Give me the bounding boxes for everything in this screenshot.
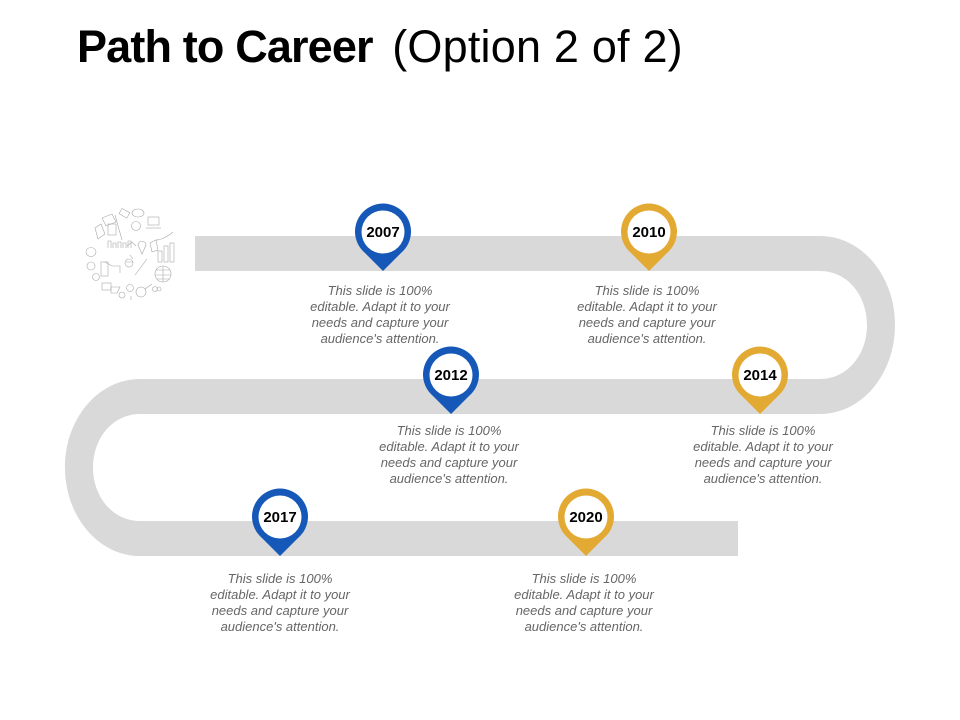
title: Path to Career (Option 2 of 2) <box>77 21 683 72</box>
text: 2020 description: audience's attention. <box>525 619 643 634</box>
text: 2010 description: editable. Adapt it to your <box>577 299 717 314</box>
text: 2017 description: This slide is 100% <box>228 571 332 586</box>
text: 2017 description: audience's attention. <box>221 619 339 634</box>
text: 2007 description <box>310 283 450 346</box>
pin: 2014: 2014 <box>743 367 777 384</box>
text: 2012 description <box>379 423 520 486</box>
text: 2020 description: needs and capture your <box>516 603 652 618</box>
text: 2007 description: editable. Adapt it to your <box>310 299 450 314</box>
pin: 2010 <box>621 204 677 271</box>
text: 2012 description: This slide is 100% <box>397 423 501 438</box>
text: 2007 description: needs and capture your <box>312 315 448 330</box>
text: 2014 description <box>693 423 834 486</box>
text: 2014 description: needs and capture your <box>695 455 831 470</box>
pin: 2020: 2020 <box>569 509 603 526</box>
pin: 2017: 2017 <box>263 509 297 526</box>
pin: 2020 <box>558 489 614 556</box>
text: 2017 description: needs and capture your <box>212 603 348 618</box>
text: 2010 description <box>577 283 718 346</box>
text: 2014 description: This slide is 100% <box>711 423 815 438</box>
text: 2012 description: needs and capture your <box>381 455 517 470</box>
text: 2010 description: audience's attention. <box>588 331 706 346</box>
text: 2020 description: editable. Adapt it to your <box>514 587 654 602</box>
text: 2007 description: audience's attention. <box>321 331 439 346</box>
pin: 2014 <box>732 347 788 414</box>
text: 2007 description: This slide is 100% <box>328 283 432 298</box>
text: 2017 description <box>210 571 350 634</box>
text: 2017 description: editable. Adapt it to your <box>210 587 350 602</box>
text: 2010 description: This slide is 100% <box>595 283 699 298</box>
icon: circular career doodles <box>86 208 174 300</box>
pin: 2010: 2010 <box>632 224 666 241</box>
text: 2020 description <box>514 571 654 634</box>
pin: 2012: 2012 <box>434 367 468 384</box>
text: 2012 description: audience's attention. <box>390 471 508 486</box>
pin: 2017 <box>252 489 308 556</box>
pin: 2007 <box>355 204 411 271</box>
pin: 2007: 2007 <box>366 224 400 241</box>
winding road path <box>65 236 895 556</box>
text: 2020 description: This slide is 100% <box>532 571 636 586</box>
text: 2010 description: needs and capture your <box>579 315 715 330</box>
text: 2014 description: audience's attention. <box>704 471 822 486</box>
text: 2014 description: editable. Adapt it to your <box>693 439 833 454</box>
text: 2012 description: editable. Adapt it to your <box>379 439 519 454</box>
pin: 2012 <box>423 347 479 414</box>
